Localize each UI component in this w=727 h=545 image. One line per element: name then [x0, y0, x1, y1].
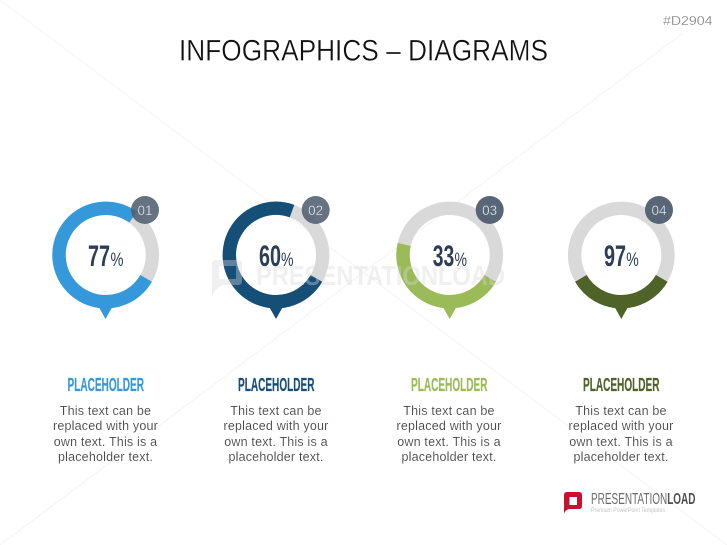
watermark [212, 260, 505, 297]
heading: PLACEHOLDER [411, 375, 488, 395]
value 77%: 77 [88, 240, 110, 273]
badge 01 [131, 196, 159, 224]
panel: 01 [42, 191, 169, 464]
body text: own text. This is a [397, 435, 501, 449]
body text: own text. This is a [54, 435, 157, 449]
donut chart 60% [212, 191, 340, 319]
value 33%: % [454, 250, 467, 271]
body text: placeholder text. [228, 450, 324, 464]
donut chart 77% [42, 191, 169, 319]
badge 04: 04 [651, 203, 667, 218]
body text: replaced with your [568, 419, 674, 433]
value 97%: 97 [604, 240, 626, 273]
body text: This text can be [230, 404, 322, 418]
body text: This text can be [60, 404, 151, 418]
badge 04 [645, 196, 673, 224]
donut chart 97% [558, 191, 685, 319]
logo wordmark: PRESENTATIONLOAD [591, 491, 696, 508]
logo tagline: Premium PowerPoint Templates [591, 507, 666, 514]
title: INFOGRAPHICS – DIAGRAMS [179, 35, 548, 68]
body text: This text can be [403, 404, 495, 418]
body text: placeholder text. [573, 450, 669, 464]
body text: This text can be [575, 404, 667, 418]
body text: own text. This is a [569, 435, 673, 449]
body text: placeholder text. [58, 450, 153, 464]
panel: 04 [558, 191, 685, 464]
logo: PresentationLoad [564, 491, 696, 514]
body text: placeholder text. [401, 450, 497, 464]
heading: PLACEHOLDER [583, 375, 660, 395]
donut chart 33% [386, 191, 513, 319]
heading: PLACEHOLDER [68, 375, 144, 395]
heading: PLACEHOLDER [238, 375, 314, 395]
body text: replaced with your [223, 419, 329, 433]
badge 03: 03 [482, 203, 497, 218]
value 97%: % [626, 250, 639, 271]
value 77%: % [110, 250, 124, 271]
value 33%: 33 [433, 240, 454, 273]
value 60%: 60 [259, 240, 281, 273]
body text: own text. This is a [224, 435, 328, 449]
panel: 03 [386, 191, 513, 464]
icon: logo mark [564, 492, 582, 514]
value 60%: % [281, 250, 294, 271]
badge 01: 01 [137, 203, 153, 218]
code label: #D2904 [663, 13, 712, 28]
body text: replaced with your [396, 419, 502, 433]
badge 02 [302, 196, 330, 224]
body text: replaced with your [53, 419, 158, 433]
badge 03 [476, 196, 504, 224]
panel: 02 [212, 191, 340, 464]
badge 02: 02 [308, 203, 323, 218]
watermark: PRESENTATIONLOAD [256, 260, 505, 291]
